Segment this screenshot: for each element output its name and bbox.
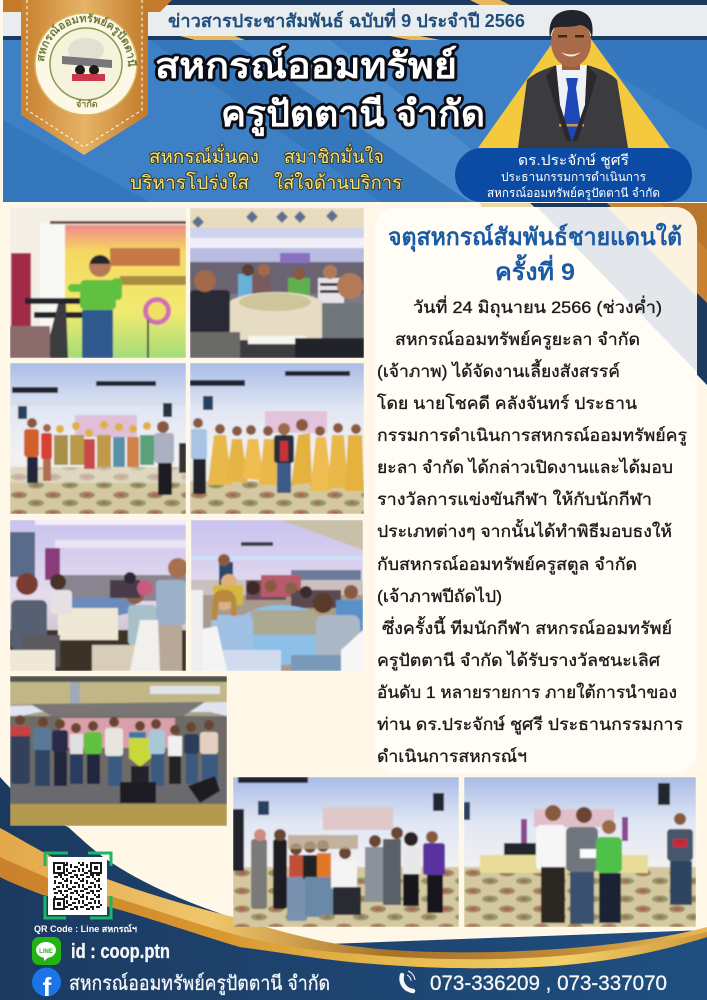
article body: ครูปัตตานี จำกัด ได้รับรางวัลชนะเลิศ: [377, 650, 660, 671]
photo: award presentation: [464, 777, 696, 927]
main title: [155, 45, 485, 137]
article body: อันดับ 1 หลายรายการ ภายใต้การนำของ: [377, 682, 677, 702]
article body: สหกรณ์ออมทรัพย์ครูยะลา จำกัด: [395, 330, 640, 350]
slogans: [130, 143, 402, 194]
article body: [377, 295, 687, 766]
article body: กับสหกรณ์ออมทรัพย์ครูสตูล จำกัด: [377, 555, 637, 575]
photo: women at dinner table: [10, 520, 186, 671]
slogans: สหกรณ์มั่นคง: [149, 143, 259, 168]
QR code caption: QR Code : Line สหกรณ์ฯ: [34, 923, 137, 934]
logo seal: [34, 12, 138, 116]
article body: ยะลา จำกัด ได้กล่าวเปิดงานและได้มอบ: [377, 457, 673, 477]
diagonal corner stripes: [480, 203, 707, 385]
photo: dancers in gold dresses: [190, 363, 364, 514]
icon: LINE: LINE: [39, 949, 53, 955]
photo: team group with banner on stage: [10, 676, 227, 826]
icon: phone: [402, 971, 415, 991]
main title: ครูปัตตานี จำกัด: [221, 93, 485, 137]
Facebook page name: สหกรณ์ออมทรัพย์ครูปัตตานี จำกัด: [69, 972, 330, 996]
article body: ท่าน ดร.ประจักษ์ ชูศรี ประธานกรรมการ: [377, 715, 683, 735]
article body: วันที่ 24 มิถุนายน 2566 (ช่วงค่ำ): [413, 295, 662, 318]
photo: group on carpet: [233, 777, 459, 927]
footer navy wedge and gold swoosh: [0, 777, 707, 1000]
article body: (เจ้าภาพ) ได้จัดงานเลี้ยงสังสรรค์: [377, 359, 620, 381]
article body: กรรมการดำเนินการสหกรณ์ออมทรัพย์ครู: [377, 426, 687, 446]
ribbon badge with logo: [3, 0, 172, 155]
article body: ซึ่งครั้งนี้ ทีมนักกีฬา สหกรณ์ออมทรัพย์: [382, 616, 672, 638]
photo: guests at round table: [190, 208, 364, 358]
photo: performers in costume: [10, 363, 186, 514]
QR code: [45, 853, 111, 918]
article heading: [388, 222, 682, 286]
article heading: จตุสหกรณ์สัมพันธ์ชายแดนใต้: [388, 222, 682, 253]
article body: รางวัลการแข่งขันกีฬา ให้กับนักกีฬา: [377, 489, 652, 509]
main title: สหกรณ์ออมทรัพย์: [155, 45, 457, 86]
article heading: ครั้งที่ 9: [495, 253, 575, 286]
logo seal: สหกรณ์ออมทรัพย์ครูปัตตานี: [38, 13, 138, 67]
article body: (เจ้าภาพปีถัดไป): [377, 586, 502, 606]
article body: โดย นายโชคดี คลังจันทร์ ประธาน: [377, 393, 637, 413]
icon: LINE: [32, 937, 61, 965]
phone numbers: 073-336209 , 073-337070: [430, 972, 667, 995]
newsletter issue line: ข่าวสารประชาสัมพันธ์ ฉบับที่ 9 ประจำปี 2566: [168, 8, 525, 31]
gold triangle behind portrait: [478, 14, 670, 148]
chairman caption pill: สหกรณ์ออมทรัพย์ครูปัตตานี จำกัด: [487, 186, 660, 201]
photo: speaker on stage: [10, 208, 186, 358]
slogans: ใส่ใจด้านบริการ: [274, 172, 402, 194]
logo seal: จำกัด: [76, 99, 98, 109]
panel: article text: [375, 207, 697, 773]
header banner: [3, 0, 707, 202]
slogans: บริหารโปร่งใส: [130, 171, 249, 194]
article body: ประเภทต่างๆ จากนั้นได้ทำพิธีมอบธงให้: [377, 519, 672, 541]
LINE id: id : coop.ptn: [71, 941, 170, 963]
article body: ดำเนินการสหกรณ์ฯ: [377, 747, 527, 766]
slogans: สมาชิกมั่นใจ: [284, 143, 384, 168]
chairman caption pill: [455, 148, 692, 202]
chairman caption pill: ประธานกรรมการดำเนินการ: [501, 170, 647, 184]
icon: Facebook: [32, 968, 61, 1000]
photo: guests at blue table: [191, 520, 363, 671]
chairman caption pill: ดร.ประจักษ์ ชูศรี: [518, 152, 630, 169]
portrait of chairman: [518, 10, 628, 148]
